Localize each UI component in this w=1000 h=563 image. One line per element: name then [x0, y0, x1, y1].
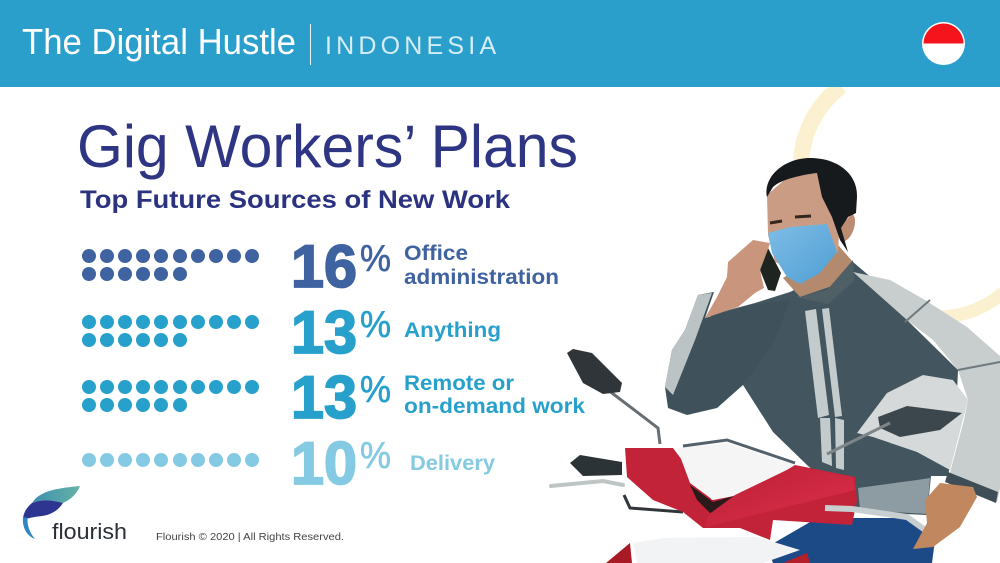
jacket right sleeve [853, 272, 1000, 502]
dots: 13 [82, 380, 259, 412]
title: Gig Workers’ Plans [77, 113, 578, 180]
value: 10% [291, 430, 391, 497]
sleeve seams [905, 300, 1000, 370]
value: 13% [291, 364, 391, 431]
logo: flourish [23, 486, 127, 544]
icon: Indonesia flag [922, 22, 965, 65]
row: office administration 16% [82, 233, 559, 300]
label: remote or on-demand work [404, 372, 585, 418]
value: 13%: % [360, 304, 391, 345]
jacket left sleeve [665, 292, 790, 415]
grip and lever [551, 455, 683, 512]
face mask [768, 224, 837, 284]
header country: INDONESIA [325, 32, 500, 60]
jacket torso [710, 262, 958, 515]
neck [783, 245, 853, 297]
row: anything 13% [82, 299, 501, 366]
right hand [913, 483, 977, 549]
row: delivery 10% [82, 430, 495, 497]
label: office administration: administration [404, 266, 559, 289]
jacket collar [783, 260, 854, 304]
dots: 13 [82, 315, 259, 347]
dots: 16 [82, 249, 259, 281]
right mirror stalk [827, 423, 890, 454]
sleeve cuff [945, 472, 998, 503]
jacket stripes [805, 308, 844, 470]
label: remote or on-demand work: on-demand work [404, 395, 585, 418]
value: 10%: % [360, 435, 391, 476]
photo: gig worker on scooter [551, 158, 1000, 563]
value: 13% [291, 299, 391, 366]
value: 16%: % [360, 238, 391, 279]
header title: The Digital Hustle [22, 21, 296, 62]
label: remote or on-demand work: Remote or [404, 372, 514, 395]
subtitle: Top Future Sources of New Work [80, 186, 510, 214]
logo: flourish: flourish [52, 519, 127, 544]
red fairing [625, 440, 857, 540]
value: 10%: 10 [291, 430, 357, 497]
row: remote or on-demand work 13% [82, 364, 585, 431]
label: office administration: Office [404, 242, 468, 265]
value: 13%: % [360, 369, 391, 410]
label: delivery: Delivery [410, 452, 495, 475]
jacket waist band [858, 478, 930, 514]
value: 13%: 13 [291, 364, 357, 431]
left mirror [567, 349, 660, 444]
dots: 10 [82, 453, 259, 467]
copyright: Flourish © 2020 | All Rights Reserved. [156, 531, 344, 543]
label: anything: Anything [404, 319, 501, 342]
value: 16% [291, 233, 391, 300]
value: 13%: 13 [291, 299, 357, 366]
value: 16%: 16 [291, 233, 357, 300]
label: office administration [404, 242, 559, 289]
phone [760, 248, 781, 291]
hair [767, 158, 857, 252]
decorative ring [801, 86, 1000, 317]
header bar [0, 0, 1000, 87]
jeans [767, 518, 935, 563]
hand at phone [705, 240, 770, 318]
eyes [770, 216, 811, 223]
right handlebar [825, 508, 925, 530]
lower scooter body [606, 537, 810, 563]
head [767, 158, 857, 284]
helmet [857, 375, 968, 470]
